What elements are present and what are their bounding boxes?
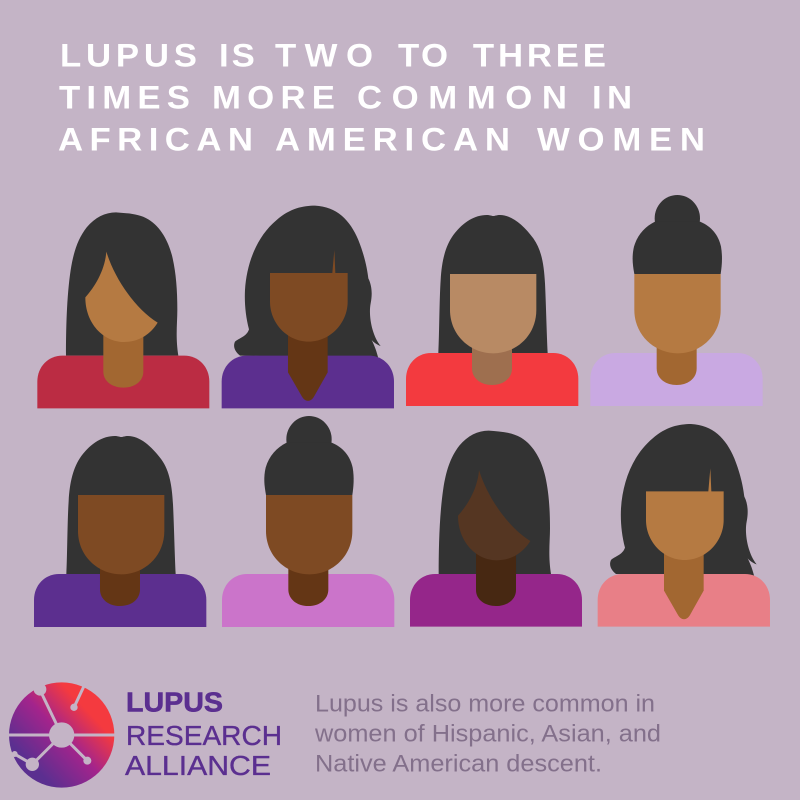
title: COMMON	[357, 81, 567, 116]
logo mark: network circle	[7, 682, 117, 788]
woman 5: straight hair with bangs, purple top	[34, 436, 206, 627]
descriptive text: Lupus is also more common in	[315, 691, 655, 718]
title: TO	[398, 39, 448, 74]
woman 3: straight hair with bangs, red top	[406, 215, 578, 406]
title: IS	[219, 39, 255, 74]
title: IN	[592, 81, 632, 116]
title: LUPUS	[60, 39, 197, 74]
title: WOMEN	[537, 123, 705, 158]
title: AMERICAN	[275, 123, 510, 158]
descriptive text: Native American descent.	[315, 751, 602, 778]
woman 7: side-swept hair, magenta top	[410, 431, 582, 627]
descriptive text: women of Hispanic, Asian, and	[314, 721, 661, 748]
title: TIMES	[59, 81, 190, 116]
woman 6: hair bun, pink top	[222, 416, 394, 627]
woman 1: side-swept hair, red top	[37, 212, 209, 408]
title: MORE	[212, 81, 335, 116]
logo wordmark: RESEARCH	[126, 720, 282, 751]
logo wordmark	[125, 687, 282, 781]
descriptive text	[314, 691, 661, 778]
title: AFRICAN	[58, 123, 253, 158]
title: TWO	[275, 39, 373, 74]
woman 8: wavy hair, coral top	[598, 424, 770, 627]
woman 4: hair bun, lilac top	[590, 195, 763, 406]
title: THREE	[473, 39, 606, 74]
logo wordmark: LUPUS	[126, 687, 223, 718]
logo wordmark: ALLIANCE	[125, 750, 271, 781]
title	[58, 39, 705, 158]
woman 2: wavy hair, purple top	[222, 206, 394, 408]
